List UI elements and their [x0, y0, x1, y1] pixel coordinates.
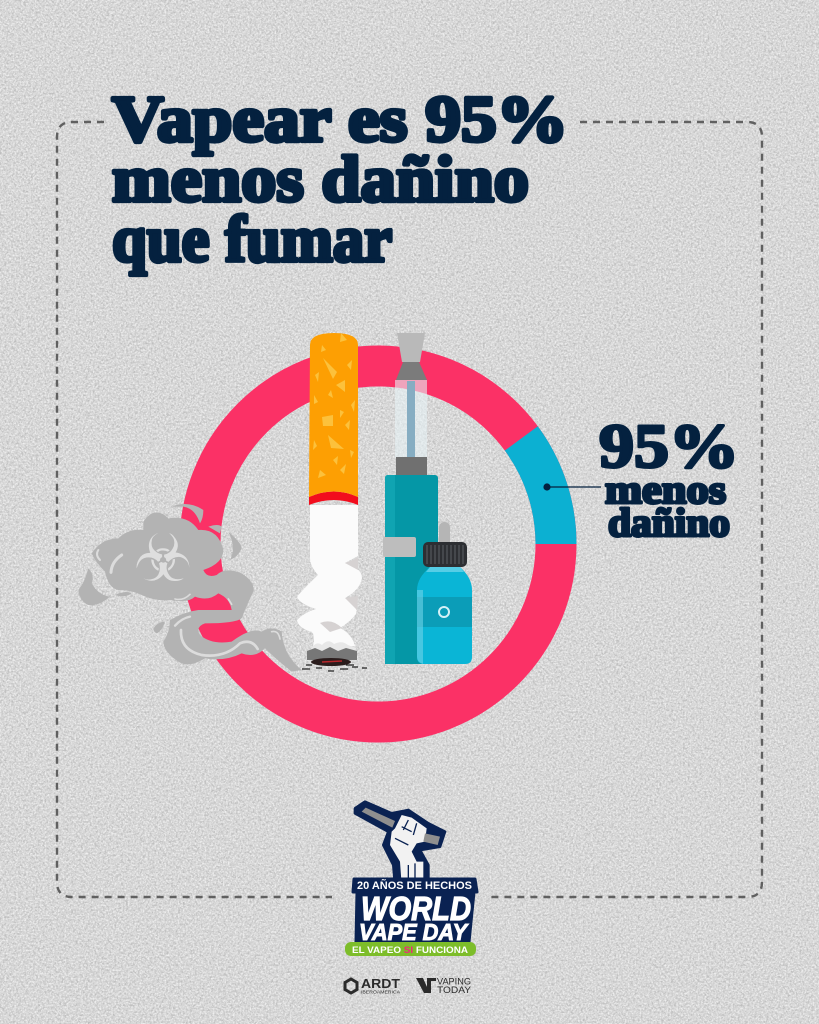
callout: 95% menos dañino: menos	[605, 467, 726, 512]
callout: 95% menos dañino: 95%	[599, 413, 739, 481]
dashed frame	[57, 122, 762, 897]
badge wordmark	[353, 879, 477, 945]
logo: Vaping Today: VAPING	[437, 976, 471, 988]
icon: vape pen	[383, 333, 438, 664]
logo: ARDT Iberoamerica	[345, 976, 400, 994]
logo: World Vape Day	[345, 802, 477, 956]
title: Vapear es 95%	[112, 83, 568, 156]
callout: 95% menos dañino	[543, 413, 739, 545]
badge wordmark: 20 AÑOS DE HECHOS	[357, 879, 472, 892]
icon: smoke with biohazard	[78, 504, 302, 672]
donut chart: 95% less harmful	[200, 366, 556, 722]
slogan pill	[345, 942, 476, 956]
logo: ARDT Iberoamerica: ARDT	[361, 976, 400, 991]
title	[112, 83, 568, 276]
icon: e-liquid bottle	[417, 522, 472, 664]
title: que fumar	[112, 203, 392, 276]
title: menos dañino	[112, 143, 529, 216]
callout: 95% menos dañino: dañino	[608, 500, 730, 545]
slogan pill: EL VAPEO SI FUNCIONA	[352, 945, 468, 956]
logo: Vaping Today	[416, 976, 472, 996]
ash and embers	[302, 641, 367, 671]
badge wordmark: VAPE DAY	[359, 919, 470, 945]
badge wordmark: WORLD	[361, 890, 471, 927]
fist badge	[355, 802, 445, 885]
logo: ARDT Iberoamerica: IBEROAMERICA	[361, 990, 400, 994]
icon: cigarette	[297, 333, 367, 671]
logo: Vaping Today: TODAY	[437, 985, 472, 996]
icon: smoke with biohazard: ☣	[133, 520, 193, 597]
